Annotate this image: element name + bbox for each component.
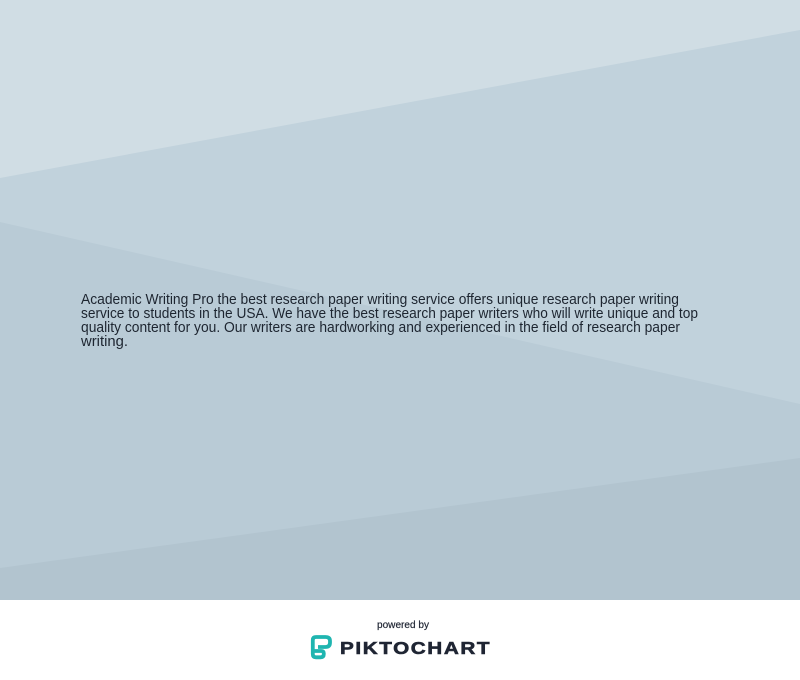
text block: description paragraph: service to students in the USA. We have the best research paper writers who will write unique and top: [81, 306, 698, 322]
text: Piktochart wordmark: PIKTOCHART: [340, 638, 490, 659]
text: powered by: powered by: [377, 620, 429, 631]
text block: description paragraph: [80, 292, 698, 350]
text block: description paragraph: writing.: [80, 334, 128, 350]
text block: description paragraph: Academic Writing Pro the best research paper writing service offers unique research paper writing: [81, 292, 679, 308]
footer: powered by Piktochart: [0, 600, 800, 680]
text block: description paragraph: quality content for you. Our writers are hardworking and experienced in the field of research paper: [81, 320, 680, 336]
icon: Piktochart logo mark: [313, 637, 330, 657]
